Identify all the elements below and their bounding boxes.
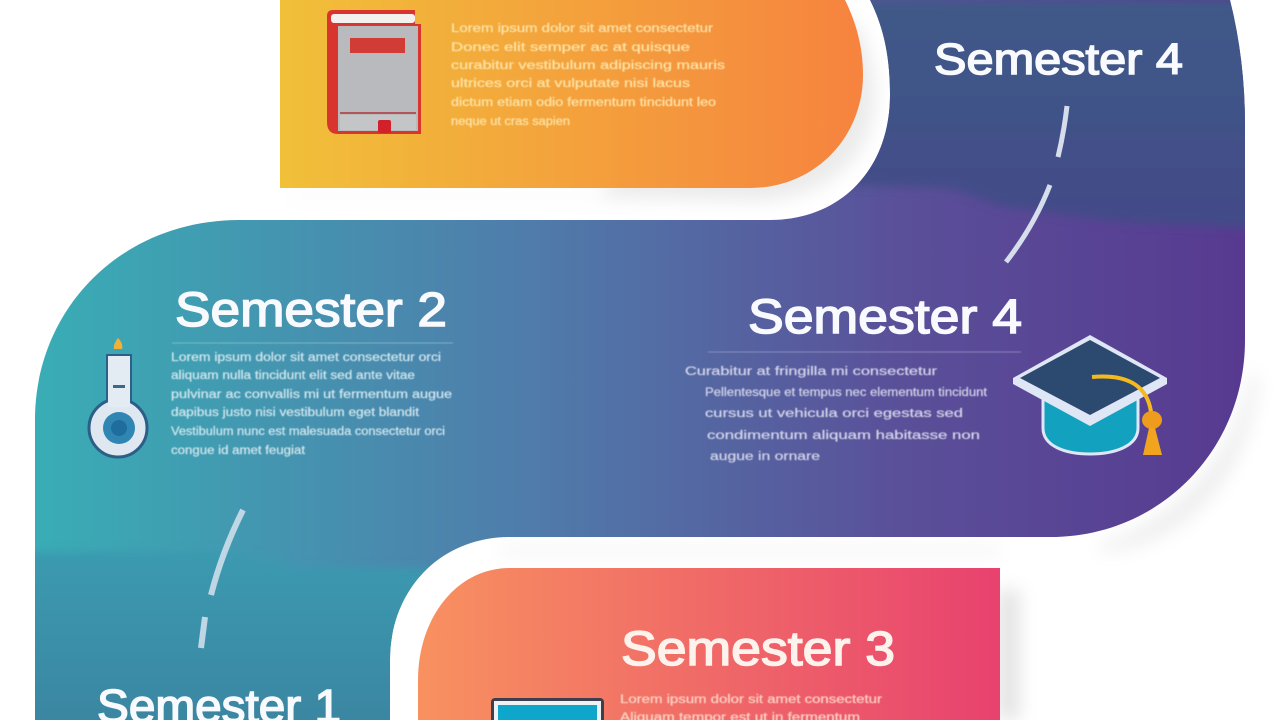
text block: orange card body: neque ut cras sapien bbox=[451, 116, 570, 128]
text block: Semester 2 body: Vestibulum nunc est malesuada consectetur orci bbox=[171, 426, 445, 438]
text block: orange card body bbox=[451, 23, 725, 128]
text block: pink card body bbox=[620, 694, 882, 720]
panel: teal lower section bbox=[20, 552, 430, 720]
icon: graduation cap bbox=[1013, 335, 1167, 455]
text block: Semester 4 body: Pellentesque et tempus nec elementum tincidunt bbox=[705, 387, 988, 399]
text block: orange card body: Lorem ipsum dolor sit amet consectetur bbox=[451, 23, 713, 35]
text block: orange card body: ultrices orci at vulputate nisi lacus bbox=[451, 78, 690, 90]
text block: Semester 2 body: Lorem ipsum dolor sit amet consectetur orci bbox=[171, 352, 441, 364]
icon: flask bbox=[89, 338, 147, 457]
icon: red book bbox=[327, 10, 421, 134]
text block: pink card body: Lorem ipsum dolor sit amet consectetur bbox=[620, 694, 882, 706]
arrow: upper dashed path, top bbox=[1006, 106, 1067, 262]
text block: Semester 4 body: augue in ornare bbox=[710, 451, 820, 463]
arrow: lower dashed path, left bbox=[201, 510, 243, 648]
text block: Semester 2 body: congue id amet feugiat bbox=[171, 445, 306, 457]
text block: orange card body: curabitur vestibulum adipiscing mauris bbox=[451, 60, 725, 72]
text block: Semester 4 body: Curabitur at fringilla mi consectetur bbox=[685, 366, 937, 378]
text block: Semester 2 body bbox=[171, 343, 453, 457]
text block: Semester 2 body: aliquam nulla tincidunt elit sed ante vitae bbox=[171, 370, 415, 382]
text block: Semester 4 body: condimentum aliquam habitasse non bbox=[707, 430, 980, 442]
text block: Semester 4 body bbox=[685, 352, 1021, 463]
heading: Semester 2: Semester 2 bbox=[175, 284, 447, 337]
soft shadows bbox=[290, 20, 1258, 720]
text block: Semester 2 body: dapibus justo nisi vestibulum eget blandit bbox=[171, 407, 420, 419]
panel: dark blue upper section bbox=[852, 0, 1245, 229]
panel: semester pink card bbox=[418, 568, 1000, 720]
heading: Semester 4 (top): Semester 4 bbox=[934, 35, 1183, 84]
icon: laptop bbox=[491, 698, 604, 720]
text block: Semester 2 body: pulvinar ac convallis mi ut fermentum augue bbox=[171, 389, 452, 401]
panel: semester orange card bbox=[280, 0, 863, 188]
text block: orange card body: dictum etiam odio fermentum tincidunt leo bbox=[451, 97, 716, 109]
heading: Semester 3: Semester 3 bbox=[621, 623, 895, 676]
text block: orange card body: Donec elit semper ac at quisque bbox=[451, 42, 690, 54]
text block: Semester 4 body: cursus ut vehicula orci egestas sed bbox=[705, 408, 963, 420]
heading: Semester 4 (middle): Semester 4 bbox=[748, 291, 1022, 344]
